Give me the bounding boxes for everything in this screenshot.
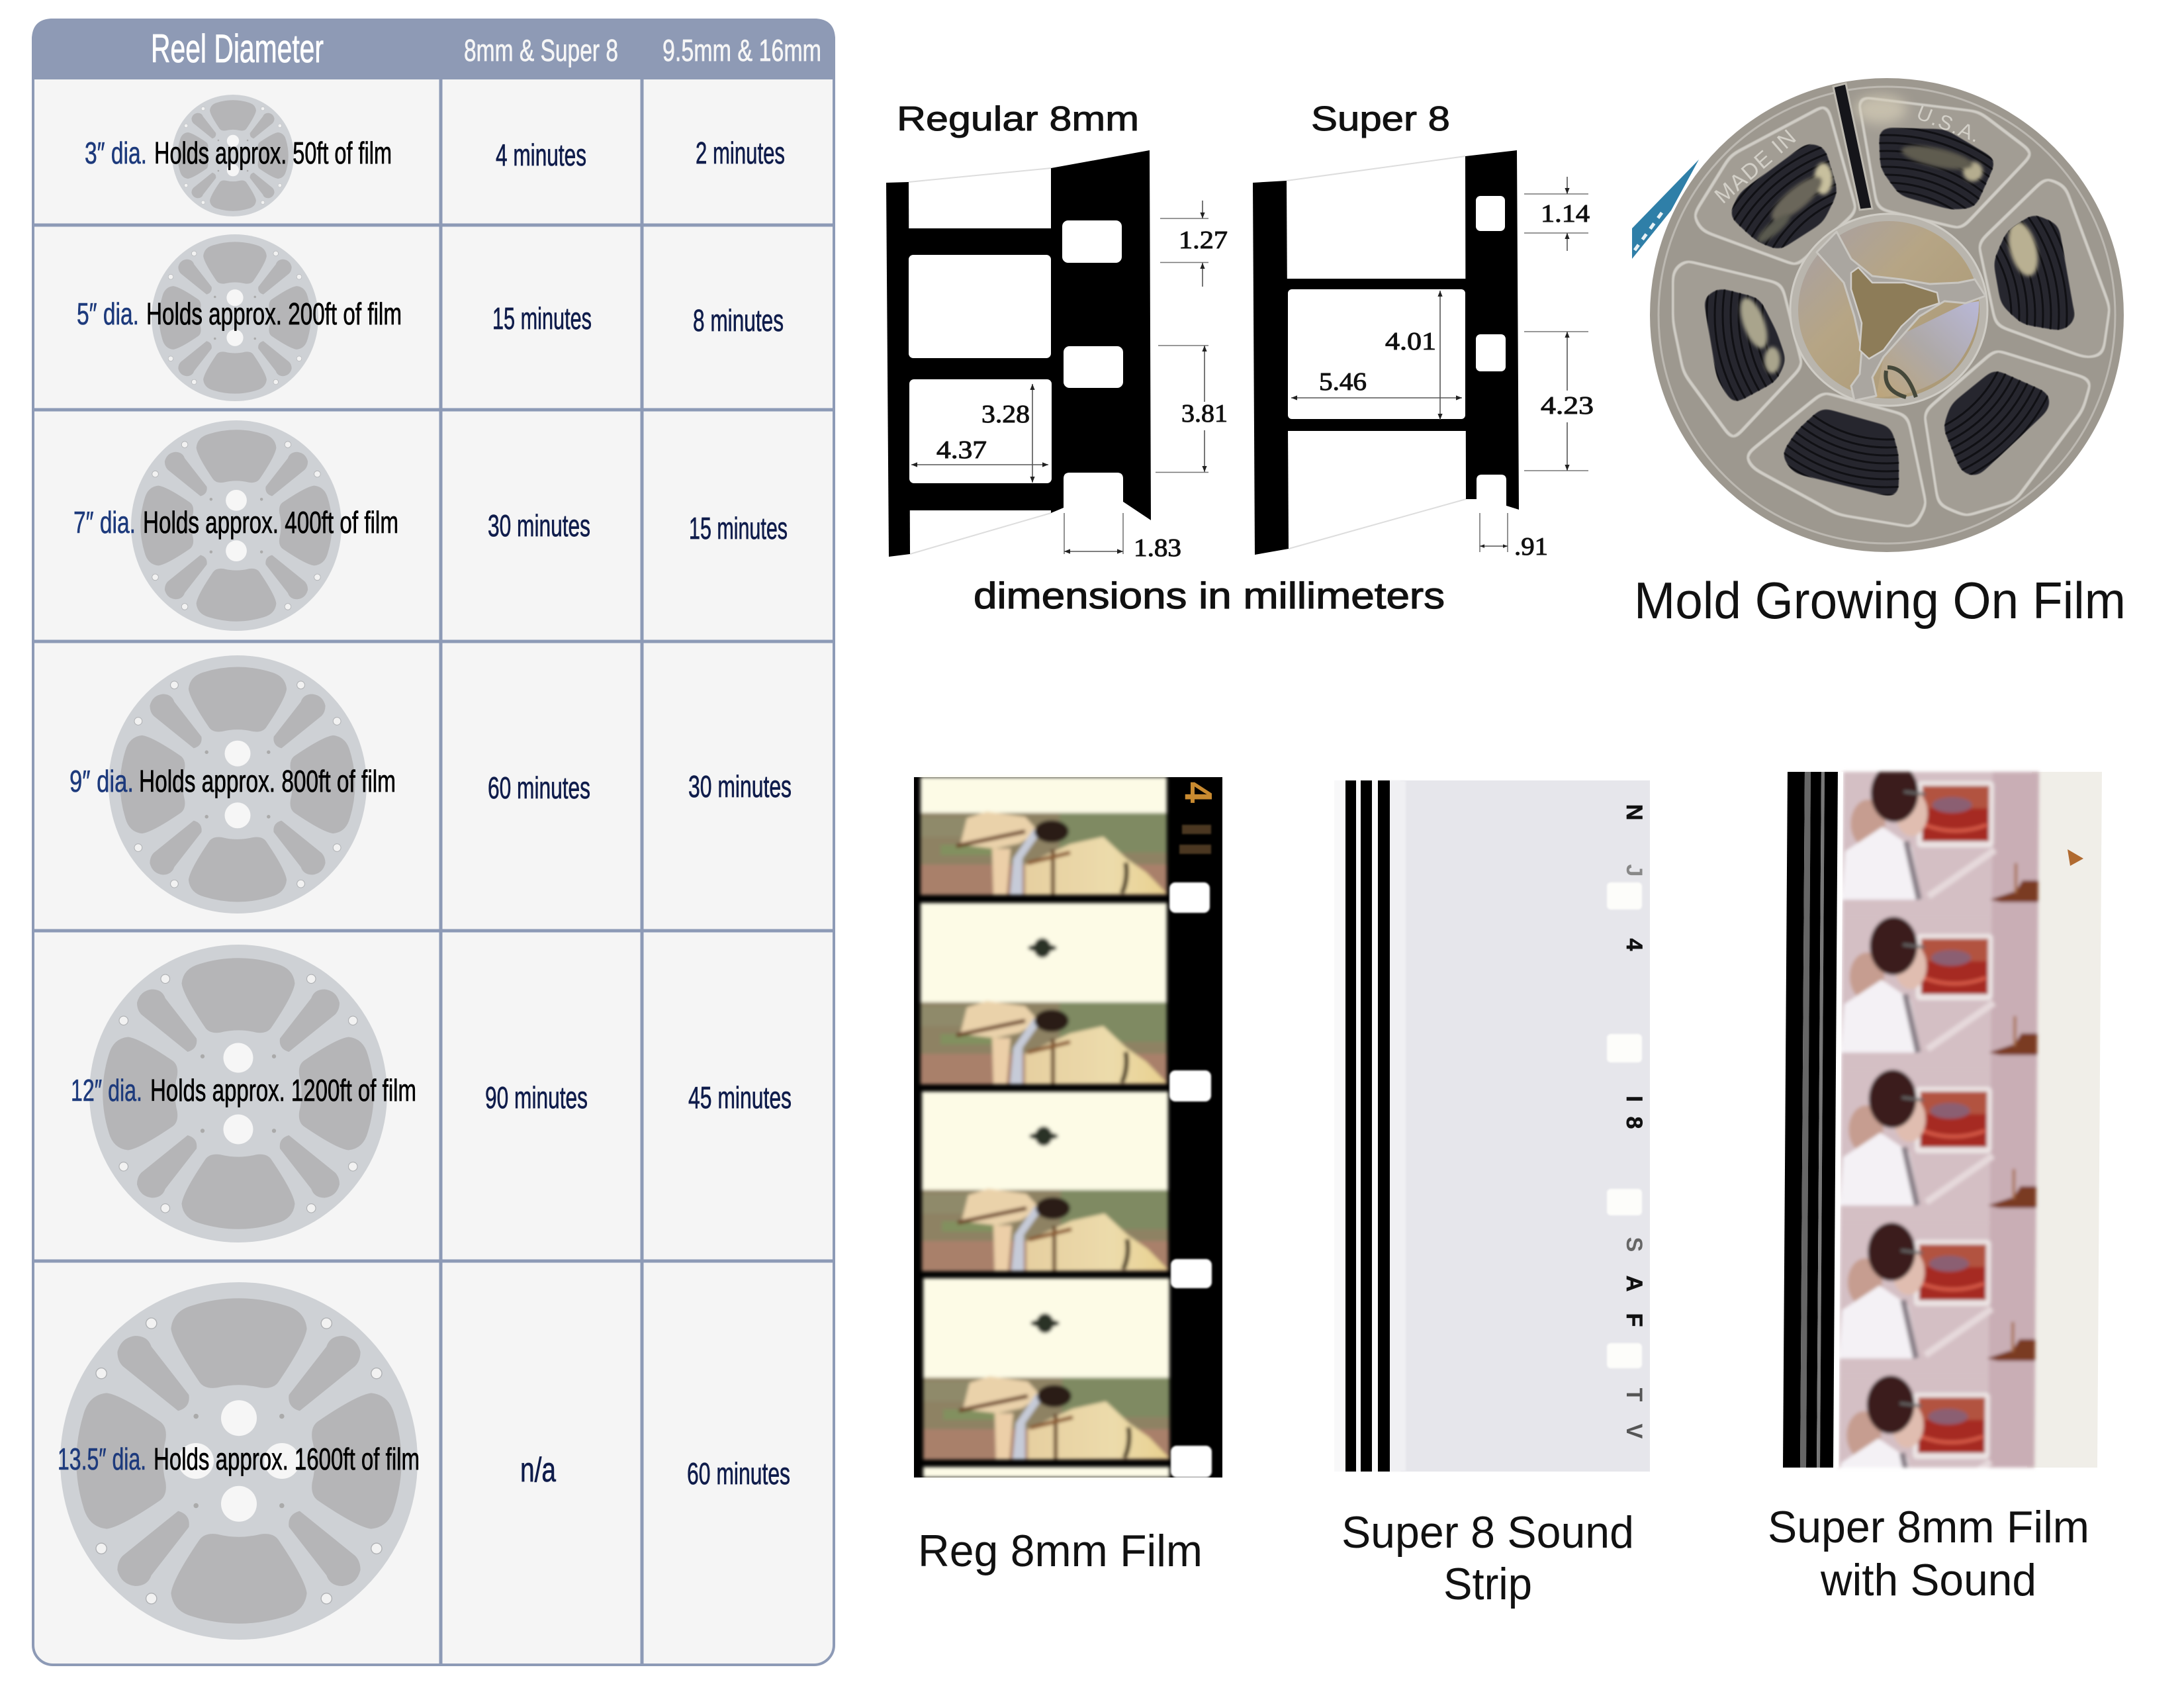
panel: regular 8mm film strip — [914, 714, 1222, 1576]
dimension: 1.27 — [1160, 201, 1228, 287]
row: 3 inch reel: 4 minutes — [496, 138, 586, 172]
row: 5 inch reel — [77, 234, 784, 401]
edge lettering: 8 — [1621, 1117, 1647, 1129]
perforations — [1607, 882, 1642, 1368]
table body — [33, 20, 834, 1665]
dimension: 3.28: 3.28 — [981, 400, 1030, 428]
edge lettering: T — [1621, 1388, 1647, 1402]
right margin — [2027, 772, 2102, 1468]
dimension: 4.23: 4.23 — [1541, 392, 1594, 420]
edge lettering: J — [1621, 865, 1647, 876]
caption: Super 8 Sound Strip: Strip — [1443, 1559, 1532, 1609]
edge lettering: A — [1621, 1276, 1647, 1291]
dimension: 4.23 — [1524, 332, 1594, 471]
lower right hub sector — [1876, 301, 1979, 397]
row: 9 inch reel: 60 minutes — [488, 771, 590, 805]
dimension: 4.01: 4.01 — [1385, 328, 1436, 355]
edge lettering: V — [1621, 1424, 1647, 1439]
embossed text: U.S.A.: U.S.A. — [1913, 101, 1984, 148]
caption: dimensions in millimeters: dimensions in millimeters — [974, 575, 1445, 616]
dimension: 5.46: 5.46 — [1319, 368, 1367, 396]
row: 13.5 inch reel: Holds approx. 1600ft of film — [154, 1442, 420, 1476]
row: 13.5 inch reel: n/a — [520, 1451, 556, 1489]
row: 7 inch reel: 15 minutes — [689, 511, 788, 545]
dimension: 3.81 — [1156, 346, 1228, 473]
perforations — [1169, 882, 1212, 1477]
row: 3 inch reel: Holds approx. 50ft of film — [154, 136, 392, 170]
edge lettering: 4 — [1621, 939, 1647, 951]
edge lettering: N — [1621, 804, 1647, 820]
diagram: Regular 8mm — [886, 100, 1228, 562]
optical sound tracks — [1783, 772, 1843, 1468]
edge lettering: F — [1621, 1313, 1647, 1327]
row: 5 inch reel: 8 minutes — [693, 303, 784, 338]
three-arm spindle insert — [1817, 232, 1985, 400]
row: 5 inch reel: 5″ dia. — [77, 297, 139, 331]
edge lettering: S — [1621, 1237, 1647, 1252]
row: 7 inch reel: 7″ dia. — [73, 505, 136, 539]
row: 12 inch reel: 12″ dia. — [71, 1073, 142, 1107]
row: 3 inch reel: 3″ dia. — [85, 136, 147, 170]
row: 7 inch reel: Holds approx. 400ft of film — [143, 505, 398, 539]
row: 3 inch reel: 2 minutes — [696, 136, 785, 170]
loading slit with black film — [1833, 83, 1872, 210]
row: 13.5 inch reel: 60 minutes — [687, 1456, 790, 1491]
embossed text: MADE IN: MADE IN — [1709, 124, 1801, 208]
diagram: Super 8 — [1253, 100, 1594, 561]
edge mark: 4 — [1177, 782, 1220, 803]
reel disc — [1650, 78, 2124, 552]
film layers and mould patches — [1699, 127, 2075, 503]
header: Reel Diameter: Reel Diameter — [151, 26, 324, 71]
heading: Regular 8mm: Regular 8mm — [897, 100, 1139, 138]
caption: Super 8mm Film with Sound — [1768, 1502, 2089, 1605]
film end at rim notch — [1923, 519, 1959, 538]
spindle centre opening — [1851, 267, 1939, 359]
faded edge marks — [1179, 825, 1211, 854]
row: 12 inch reel — [71, 945, 792, 1243]
edge lettering: I — [1621, 1096, 1647, 1102]
row: 9 inch reel: Holds approx. 800ft of film — [139, 764, 396, 798]
row: 12 inch reel: Holds approx. 1200ft of film — [150, 1073, 416, 1107]
film loop inside hub — [1886, 367, 1916, 397]
caption: Super 8mm Film with Sound: with Sound — [1820, 1555, 2036, 1605]
reel sector pads — [1672, 95, 2111, 529]
dimension: 1.14 — [1524, 177, 1590, 251]
edge mark — [2068, 849, 2083, 866]
row: 12 inch reel: 45 minutes — [688, 1080, 792, 1115]
row: 7 inch reel — [73, 420, 788, 631]
photo: mouldy film reel — [1632, 78, 2126, 630]
row: 7 inch reel: 30 minutes — [488, 508, 590, 543]
reel windows with film — [1706, 130, 2073, 494]
film outline, black — [1253, 150, 1519, 555]
panel: reel capacity table — [33, 20, 834, 1665]
dimension: .91 — [1480, 513, 1548, 561]
header: 8mm and Super 8: 8mm & Super 8 — [464, 33, 618, 68]
row: 9 inch reel: 9″ dia. — [69, 764, 134, 798]
skewed strip — [1782, 764, 2102, 1528]
dimension: 1.83 — [1064, 513, 1181, 562]
caption: Super 8 Sound Strip — [1342, 1507, 1634, 1609]
shine on pad — [1854, 95, 1907, 124]
dimension: 1.27: 1.27 — [1179, 226, 1228, 254]
dimension: 3.81: 3.81 — [1181, 400, 1228, 428]
film outline, black — [886, 150, 1151, 557]
row: 5 inch reel: 15 minutes — [492, 301, 592, 336]
header: 9.5mm and 16mm: 9.5mm & 16mm — [662, 33, 821, 68]
caption: Super 8mm Film with Sound: Super 8mm Film — [1768, 1502, 2089, 1552]
row: 12 inch reel: 90 minutes — [485, 1080, 588, 1115]
row: 9 inch reel: 30 minutes — [688, 769, 792, 804]
row: 13.5 inch reel: 13.5″ dia. — [58, 1442, 146, 1476]
picture frames — [921, 714, 1169, 1477]
dimension: 1.83: 1.83 — [1134, 534, 1181, 562]
table grid lines — [33, 78, 834, 1665]
dimension: .91: .91 — [1514, 533, 1548, 561]
strip base — [914, 777, 1222, 1477]
rim highlight — [1659, 87, 2115, 543]
caption: Mold Growing On Film: Mold Growing On Film — [1634, 571, 2126, 630]
table header bar — [33, 20, 834, 78]
row: 13.5 inch reel — [58, 1282, 790, 1640]
blue film leader — [1632, 160, 1699, 259]
picture frames — [1838, 764, 2041, 1528]
caption: Super 8 Sound Strip: Super 8 Sound — [1342, 1507, 1634, 1558]
panel: film dimension diagrams — [886, 100, 1594, 616]
dimension: 4.37: 4.37 — [936, 436, 987, 464]
row: 3 inch reel — [85, 95, 785, 216]
heading: Super 8: Super 8 — [1311, 100, 1450, 138]
caption: Reg 8mm Film: Reg 8mm Film — [918, 1526, 1203, 1576]
central hub — [1790, 214, 1987, 406]
strip base — [1334, 780, 1650, 1472]
row: 9 inch reel — [69, 655, 792, 914]
edge lettering — [1621, 804, 1647, 1439]
panel: super 8mm film with sound — [1768, 764, 2102, 1605]
dimension: 1.14: 1.14 — [1541, 200, 1590, 228]
panel: super 8 sound strip — [1334, 780, 1650, 1609]
optical sound tracks — [1334, 780, 1406, 1472]
row: 5 inch reel: Holds approx. 200ft of film — [146, 297, 402, 331]
